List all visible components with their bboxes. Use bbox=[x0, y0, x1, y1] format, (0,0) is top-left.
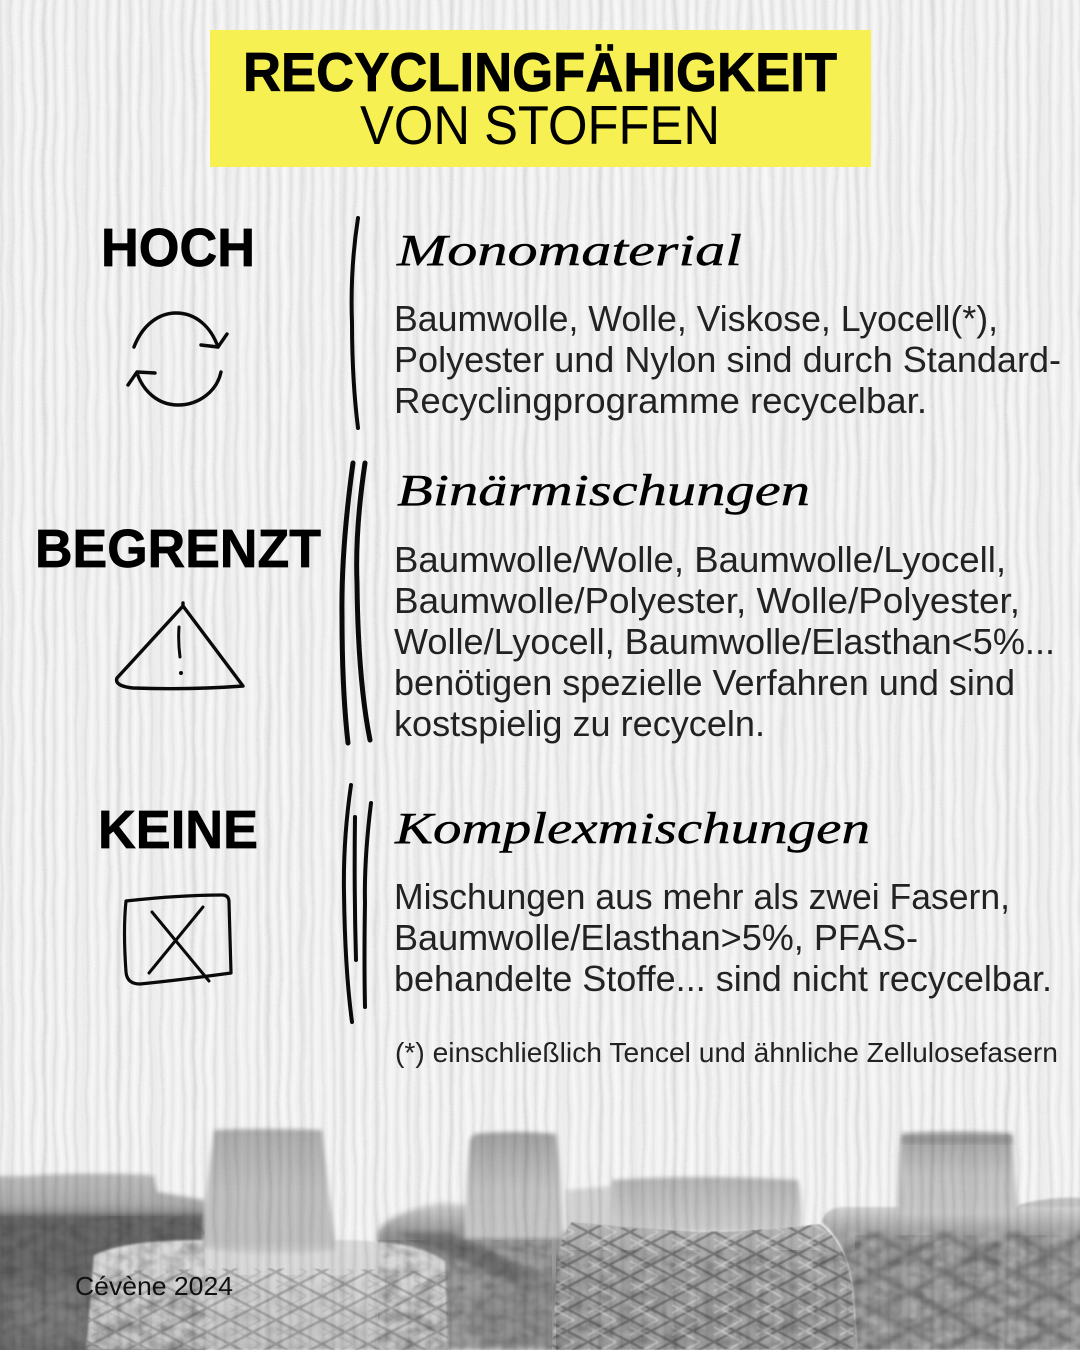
footnote: (*) einschließlich Tencel und ähnliche Zellulosefasern bbox=[395, 1037, 1058, 1068]
subheading: komplexmischungen: Komplexmischungen bbox=[394, 804, 870, 853]
icon: warning triangle bbox=[117, 603, 243, 689]
text: monomaterial description bbox=[394, 298, 1061, 421]
heading: hoch: HOCH bbox=[101, 218, 255, 278]
text: komplexmischungen description: Mischungen aus mehr als zwei Fasern, bbox=[394, 876, 1010, 917]
text: binaermischungen description: kostspielig zu recyceln. bbox=[394, 703, 765, 744]
spool: front centre, hatched bbox=[552, 1177, 857, 1350]
spool: front left, white bbox=[85, 1126, 448, 1350]
text: binaermischungen description bbox=[394, 539, 1055, 744]
text: binaermischungen description: benötigen spezielle Verfahren und sind bbox=[394, 662, 1015, 703]
text: monomaterial description: Baumwolle, Wolle, Viskose, Lyocell(*), bbox=[394, 298, 998, 339]
title line 2: VON STOFFEN bbox=[360, 94, 720, 156]
title line 1: RECYCLINGFÄHIGKEIT bbox=[243, 41, 837, 103]
divider: one stroke bbox=[352, 218, 358, 428]
text: komplexmischungen description: behandelte Stoffe... sind nicht recycelbar. bbox=[394, 958, 1052, 999]
photo: thread spools bbox=[0, 1129, 1080, 1350]
section: begrenzt bbox=[35, 463, 1055, 744]
spool: tall cone on white spool bbox=[202, 1129, 336, 1254]
subheading: binaermischungen: Binärmischungen bbox=[397, 466, 810, 515]
spool: centre back bbox=[378, 1132, 612, 1350]
divider: two strokes bbox=[342, 463, 370, 743]
text: binaermischungen description: Baumwolle/Wolle, Baumwolle/Lyocell, bbox=[394, 539, 1006, 580]
text: monomaterial description: Recyclingprogramme recycelbar. bbox=[394, 380, 927, 421]
icon: crossed box bbox=[124, 895, 231, 984]
divider: three strokes bbox=[344, 785, 371, 1022]
text: binaermischungen description: Wolle/Lyocell, Baumwolle/Elasthan<5%... bbox=[394, 621, 1055, 662]
heading: keine: KEINE bbox=[98, 800, 258, 860]
text: monomaterial description: Polyester und Nylon sind durch Standard- bbox=[394, 339, 1061, 380]
text: komplexmischungen description bbox=[394, 876, 1052, 999]
heading: begrenzt: BEGRENZT bbox=[35, 519, 321, 579]
icon: recycling arrows bbox=[128, 313, 227, 405]
spool: far left, dark bbox=[0, 1174, 205, 1350]
title banner bbox=[210, 30, 871, 167]
credit: Cévène 2024 bbox=[75, 1271, 233, 1301]
spool: far right bbox=[822, 1132, 1080, 1350]
yarn mottling bbox=[0, 1216, 1080, 1350]
section: hoch bbox=[101, 218, 1061, 428]
text: binaermischungen description: Baumwolle/Polyester, Wolle/Polyester, bbox=[394, 580, 1020, 621]
text: komplexmischungen description: Baumwolle/Elasthan>5%, PFAS- bbox=[394, 917, 918, 958]
section: keine bbox=[98, 785, 1052, 1022]
subheading: monomaterial: Monomaterial bbox=[396, 226, 742, 275]
